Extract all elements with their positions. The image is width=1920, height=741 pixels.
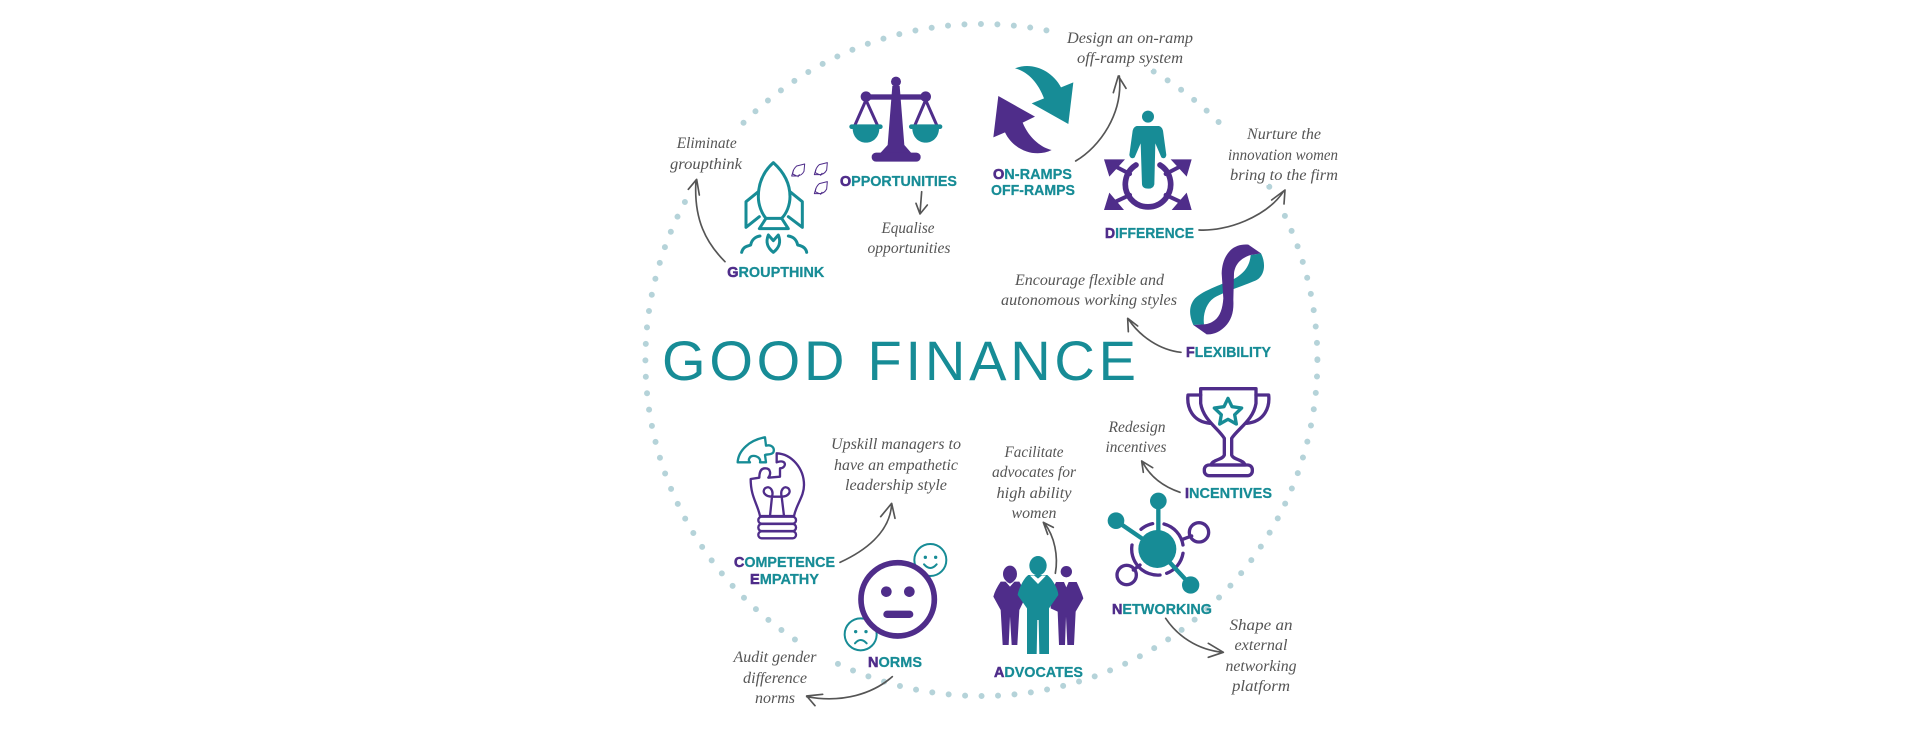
note: encourage flexible working: autonomous working styles	[1001, 292, 1177, 309]
note: facilitate advocates: Facilitate	[1004, 444, 1064, 461]
label: networking: NETWORKING	[1112, 601, 1212, 618]
note: facilitate advocates: high ability	[996, 485, 1072, 502]
note: upskill managers: have an empathetic	[834, 457, 958, 474]
note: shape an external networking platform	[1226, 617, 1296, 695]
arrow: competence to note	[840, 503, 895, 562]
label: flexibility: FLEXIBILITY	[1186, 344, 1271, 361]
arrow: networking to note	[1166, 618, 1223, 657]
note: eliminate groupthink: groupthink	[670, 156, 743, 173]
note: shape an external networking platform: external	[1234, 637, 1288, 654]
label: difference: DIFFERENCE	[1105, 225, 1194, 242]
icon: infinity ribbon	[1190, 245, 1264, 334]
panel: norms	[733, 544, 946, 707]
note: shape an external networking platform: platform	[1231, 678, 1290, 695]
arrow: advocates to note	[1043, 522, 1056, 573]
label: competence empathy: EMPATHY	[750, 571, 819, 588]
note: nurture the innovation: innovation women	[1228, 147, 1338, 164]
arrow: on-ramps to note	[1076, 76, 1126, 161]
note: equalise opportunities	[868, 220, 950, 257]
label: incentives: INCENTIVES	[1185, 485, 1272, 502]
note: eliminate groupthink: Eliminate	[676, 135, 737, 152]
label: advocates: ADVOCATES	[994, 664, 1083, 681]
icon: faces	[845, 544, 946, 650]
note: audit gender difference norms: Audit gender	[733, 649, 817, 666]
note: audit gender difference norms: norms	[755, 690, 795, 707]
icon: person with arrows	[1104, 111, 1192, 210]
note: shape an external networking platform: Shape an	[1230, 617, 1292, 634]
panel: difference	[1104, 111, 1338, 242]
note: equalise opportunities: Equalise	[881, 220, 934, 237]
note: shape an external networking platform: networking	[1226, 658, 1296, 675]
icon: scales	[849, 77, 942, 162]
note: upskill managers	[831, 436, 961, 494]
dotted circle	[645, 20, 1317, 696]
note: equalise opportunities: opportunities	[868, 240, 950, 257]
note: upskill managers: leadership style	[845, 477, 947, 494]
note: facilitate advocates: women	[1012, 505, 1056, 522]
label: on-ramps off-ramps: OFF-RAMPS	[991, 182, 1075, 199]
note: eliminate groupthink	[670, 135, 743, 173]
arrow: norms to note	[807, 677, 892, 706]
note: design an on-ramp off-ramp system: off-ramp system	[1077, 50, 1183, 67]
label: norms: NORMS	[868, 654, 922, 671]
note: audit gender difference norms: difference	[743, 670, 807, 687]
note: facilitate advocates	[992, 444, 1077, 522]
label: on-ramps off-ramps	[991, 166, 1075, 199]
label: opportunities: OPPORTUNITIES	[840, 173, 957, 190]
label: groupthink: GROUPTHINK	[727, 264, 824, 281]
icon: puzzle light bulb	[738, 437, 804, 538]
label: on-ramps off-ramps: ON-RAMPS	[993, 166, 1072, 183]
icon: trophy	[1188, 389, 1269, 476]
title: GOOD FINANCE	[662, 329, 1136, 392]
arrow: incentives to note	[1142, 461, 1180, 492]
panel: on-ramps off-ramps	[991, 30, 1193, 199]
note: design an on-ramp off-ramp system	[1066, 30, 1193, 67]
panel: flexibility	[1001, 245, 1271, 361]
note: audit gender difference norms	[733, 649, 817, 707]
note: facilitate advocates: advocates for	[992, 464, 1077, 481]
note: redesign incentives	[1106, 419, 1166, 456]
note: redesign incentives: incentives	[1106, 439, 1166, 456]
panel: opportunities	[840, 77, 957, 257]
arrow: groupthink to note	[688, 179, 725, 262]
panel: advocates	[992, 444, 1083, 681]
icon: circular arrows	[993, 66, 1073, 153]
note: upskill managers: Upskill managers to	[831, 436, 961, 453]
note: encourage flexible working: Encourage flexible and	[1014, 272, 1165, 289]
panel: groupthink	[670, 135, 827, 281]
icon: rocket	[742, 163, 827, 252]
panel: incentives	[1106, 389, 1272, 502]
icon: three people	[993, 556, 1083, 654]
note: nurture the innovation: Nurture the	[1246, 126, 1321, 143]
note: encourage flexible working	[1001, 272, 1177, 309]
arrow: difference to note	[1199, 190, 1285, 230]
icon: network hub	[1108, 493, 1209, 594]
arrow: flexibility to note	[1128, 318, 1181, 352]
panel: networking	[1108, 493, 1296, 695]
note: design an on-ramp off-ramp system: Design an on-ramp	[1066, 30, 1193, 47]
note: nurture the innovation	[1228, 126, 1338, 184]
note: nurture the innovation: bring to the firm	[1230, 167, 1338, 184]
panel: competence empathy	[734, 436, 961, 588]
label: competence empathy	[734, 554, 835, 588]
note: redesign incentives: Redesign	[1108, 419, 1166, 436]
label: competence empathy: COMPETENCE	[734, 554, 835, 571]
arrow: opportunities to note	[916, 192, 927, 214]
